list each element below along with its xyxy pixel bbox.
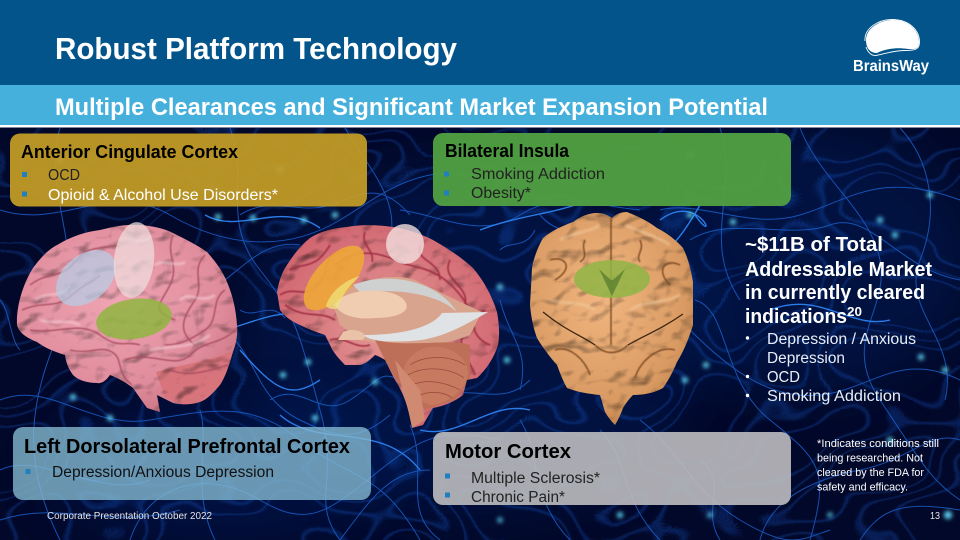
panel: bilateral insula <box>433 133 791 206</box>
panel: anterior cingulate cortex <box>10 134 367 206</box>
region: prefrontal (blue) <box>45 239 127 317</box>
brain: sagittal section <box>270 220 505 430</box>
brain: bottom view <box>525 208 697 428</box>
callout: total addressable market: ~$11B of Total <box>745 234 883 256</box>
footnote: safety and efficacy. <box>817 482 908 494</box>
bullet list: Multiple Sclerosis* <box>471 470 600 487</box>
callout: total addressable market: Depression / Anxious <box>767 331 916 348</box>
region: motor (white) <box>110 220 158 300</box>
panel: left dorsolateral prefrontal cortex <box>13 427 371 500</box>
callout: total addressable market: indications <box>745 306 847 328</box>
footnote: being researched. Not <box>817 452 923 464</box>
bullet list: Chronic Pain* <box>471 489 565 506</box>
title: Robust Platform Technology <box>55 31 458 66</box>
background: neuron network <box>0 128 960 540</box>
callout: total addressable market: Smoking Addiction <box>767 388 901 405</box>
region: insula (green) <box>574 260 650 298</box>
logo: BrainsWay: BrainsWay <box>853 58 929 75</box>
bullet list <box>445 470 600 506</box>
bullet list: Obesity* <box>471 185 531 202</box>
callout: total addressable market: OCD <box>767 369 800 386</box>
bullet list <box>22 167 278 204</box>
callout: total addressable market <box>745 234 932 405</box>
heading: Motor Cortex <box>445 441 571 463</box>
bullet list: OCD <box>48 167 80 184</box>
footnote: *Indicates conditions still <box>817 438 939 450</box>
header bar <box>0 0 960 85</box>
bullet item: Depression/Anxious Depression <box>52 464 274 481</box>
footnote: cleared by the FDA for <box>817 467 924 479</box>
region: anterior cingulate (orange) <box>293 236 375 320</box>
bullet list: Opioid & Alcohol Use Disorders* <box>48 187 278 204</box>
heading: Anterior Cingulate Cortex <box>21 142 238 162</box>
panel: motor cortex <box>433 432 791 506</box>
footnote <box>817 438 939 494</box>
subtitle band <box>0 85 960 125</box>
bullet list <box>444 166 605 202</box>
callout: total addressable market: 20 <box>847 304 862 319</box>
heading: Bilateral Insula <box>445 141 570 161</box>
footer: page number: 13 <box>930 510 940 522</box>
heading: Left Dorsolateral Prefrontal Cortex <box>24 436 350 458</box>
region: insula (green) <box>94 294 174 344</box>
footer: date: Corporate Presentation October 2022 <box>47 510 212 522</box>
logo: BrainsWay <box>853 19 929 75</box>
region: corpus callosum highlight (yellow) <box>326 276 360 309</box>
brain: left lateral view <box>10 220 242 415</box>
white divider strip <box>0 125 960 128</box>
callout: total addressable market: Depression <box>767 350 845 367</box>
region: motor (white) <box>386 224 424 264</box>
callout: total addressable market: in currently cleared <box>745 282 925 304</box>
subtitle: Multiple Clearances and Significant Market Expansion Potential <box>55 94 768 121</box>
callout: total addressable market: Addressable Market <box>745 259 932 281</box>
bullet list: Smoking Addiction <box>471 166 605 183</box>
